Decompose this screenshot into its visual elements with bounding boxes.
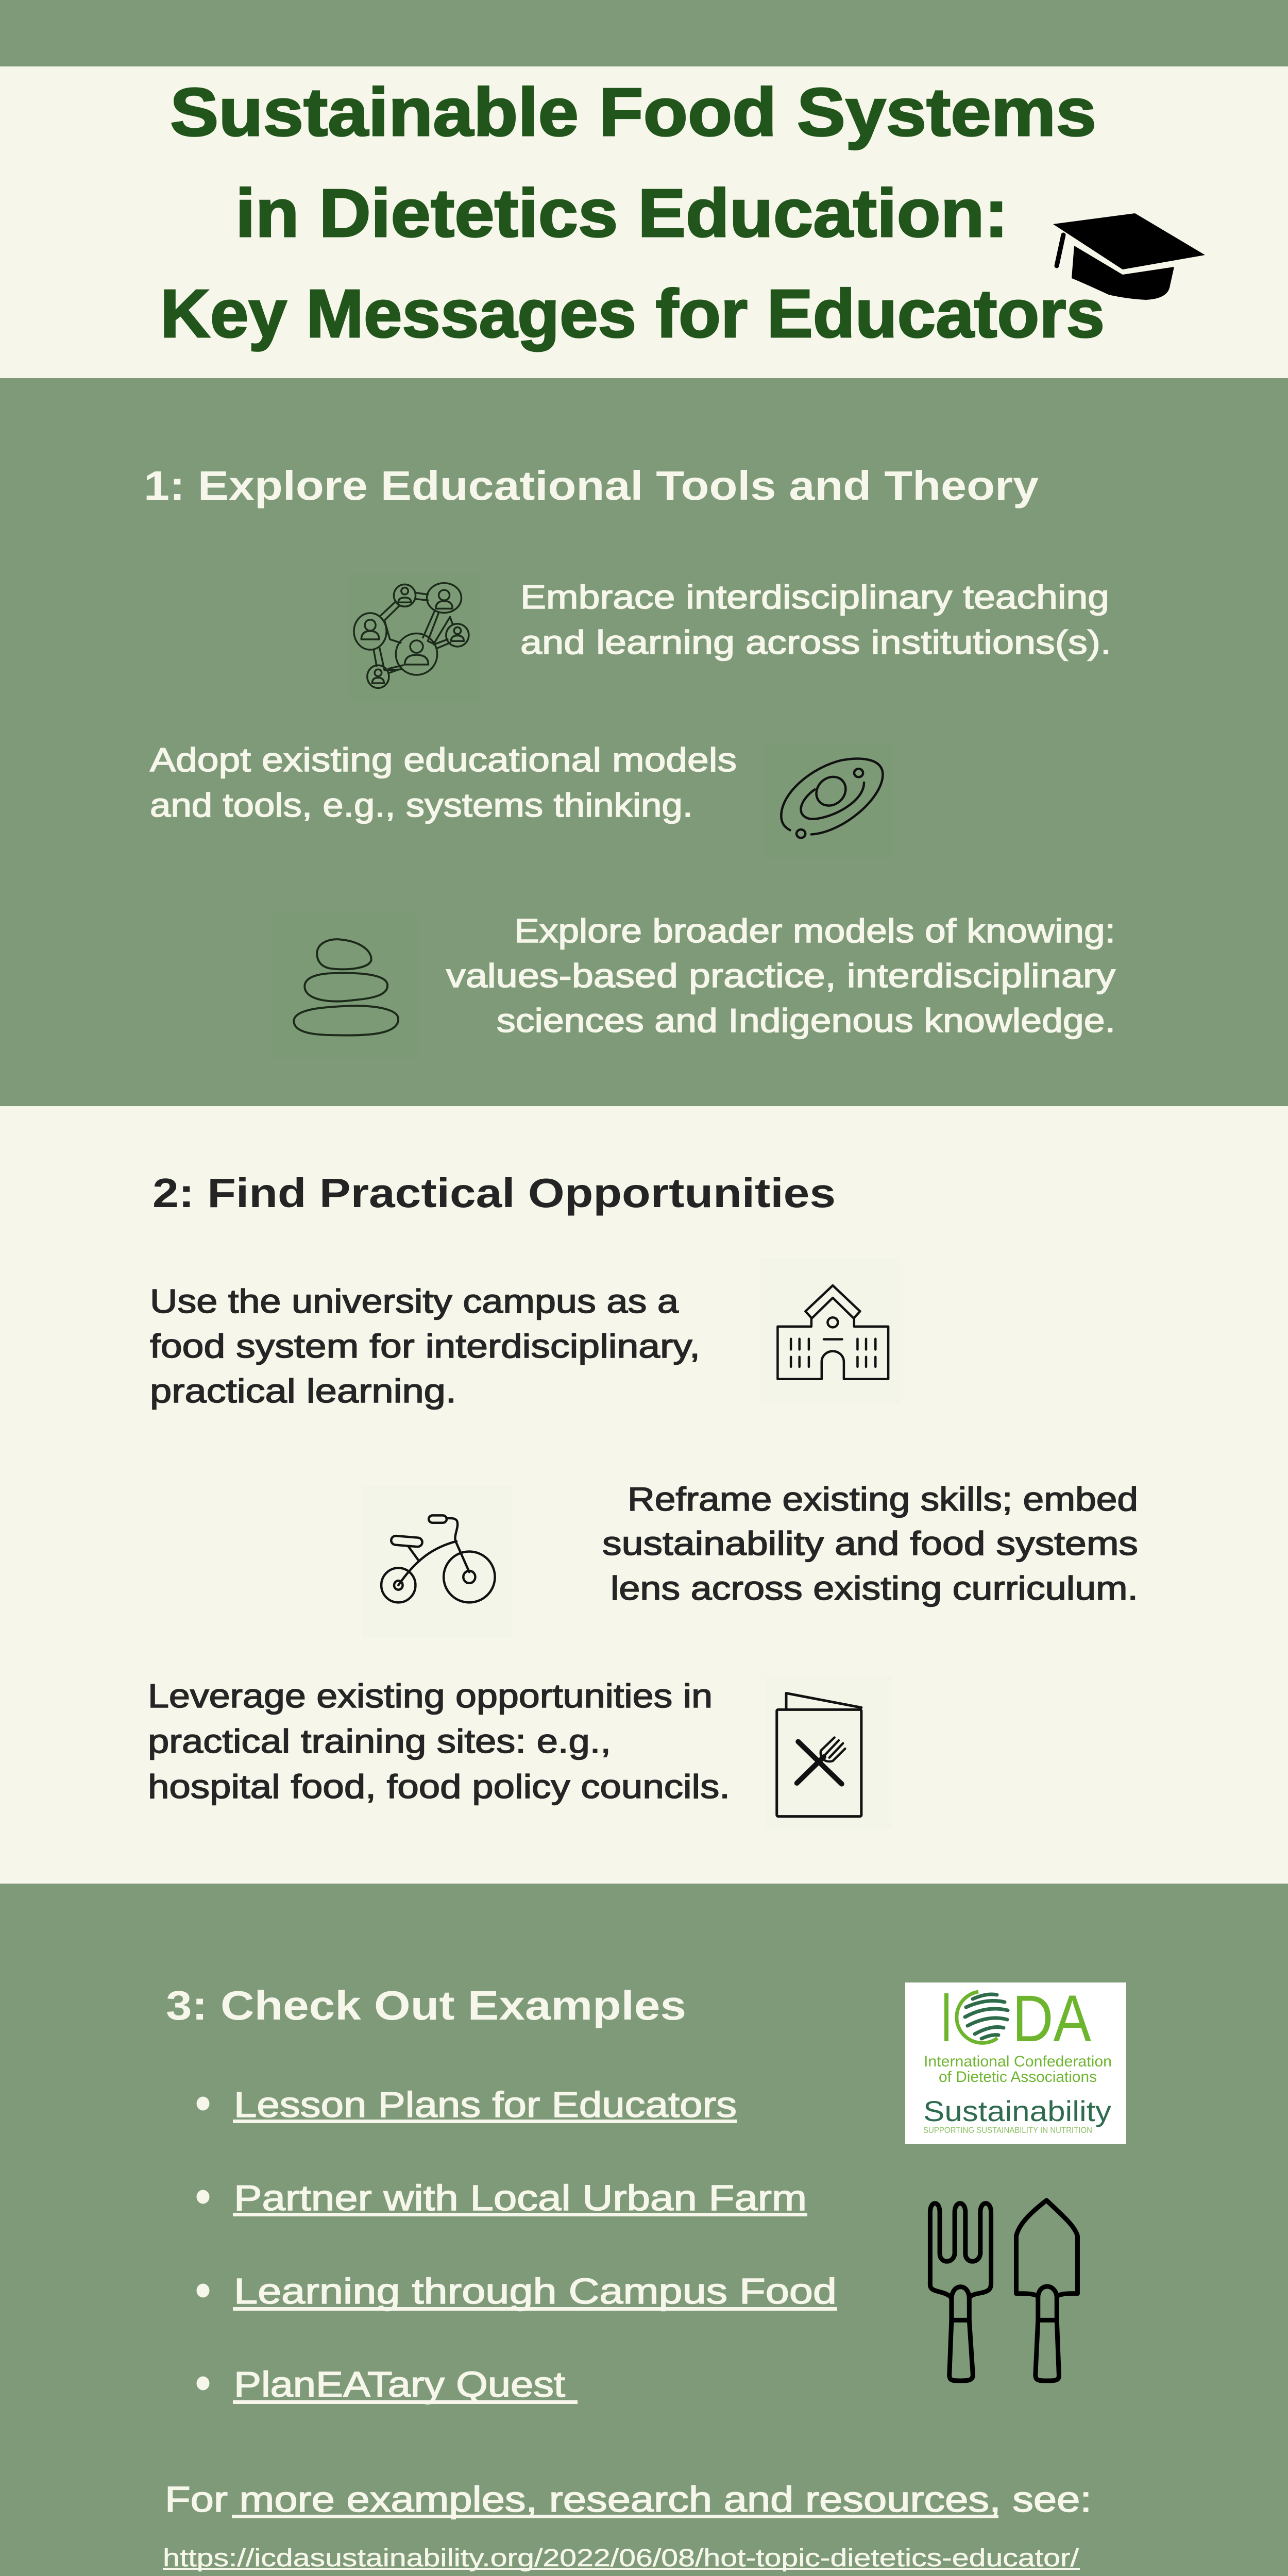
panel: section 3 check out examples: [0, 1884, 1288, 2576]
text: university campus: food system for interdisciplinary,: [150, 1327, 700, 1365]
title: in Dietetics Education:: [235, 175, 1008, 251]
text: explore broader models: Explore broader models of knowing:: [514, 912, 1115, 950]
logo: ICDA sustainability: [905, 1982, 1126, 2144]
text: explore broader models: sciences and Indigenous knowledge.: [497, 1002, 1115, 1039]
logo: ICDA sustainability: DA: [1012, 1982, 1092, 2056]
text: embrace interdisciplinary: [520, 578, 1111, 661]
panel: section 1 explore educational tools and theory: [0, 378, 1288, 1106]
list item: planeatary quest: PlanEATary Quest: [234, 2364, 565, 2404]
text: university campus: practical learning.: [150, 1372, 456, 1410]
logo: ICDA sustainability: of Dietetic Associations: [939, 2069, 1097, 2086]
list item: campus food: Learning through Campus Food: [234, 2271, 837, 2311]
text: adopt existing models: and tools, e.g., systems thinking.: [150, 786, 693, 824]
text: adopt existing models: [150, 741, 737, 824]
heading: section 1: 1: Explore Educational Tools and Theory: [144, 463, 1039, 509]
text: explore broader models: values-based practice, interdisciplinary: [446, 957, 1116, 994]
text: leverage opportunities: hospital food, food policy councils.: [148, 1768, 730, 1805]
icon: garden fork and trowel: [930, 2200, 1077, 2381]
panel: section 2 find practical opportunities: [0, 1106, 1288, 1884]
text: reframe existing skills: Reframe existing skills; embed: [628, 1480, 1138, 1518]
text: embrace interdisciplinary: and learning across institutions(s).: [520, 623, 1111, 661]
icon: people network: [347, 574, 480, 700]
text: more examples: For more examples, research and resources, see:: [165, 2479, 1092, 2519]
text: reframe existing skills: lens across existing curriculum.: [611, 1569, 1138, 1607]
text: university campus: [150, 1282, 700, 1410]
list item: lesson plans: Lesson Plans for Educators: [234, 2084, 737, 2125]
text: leverage opportunities: [148, 1677, 730, 1805]
icon: school building: [760, 1258, 901, 1404]
panel: title header: [160, 74, 1205, 351]
icon: stacked stones: [273, 914, 418, 1059]
text: explore broader models: [446, 912, 1116, 1039]
list item: urban farm: Partner with Local Urban Farm: [234, 2178, 807, 2218]
list: example links: [197, 2084, 837, 2404]
text: leverage opportunities: Leverage existing opportunities in: [148, 1677, 713, 1715]
text: reframe existing skills: [602, 1480, 1138, 1607]
icon: tricycle: [363, 1486, 512, 1638]
icon: orbit systems: [763, 744, 893, 858]
text: embrace interdisciplinary: Embrace interdisciplinary teaching: [520, 578, 1109, 616]
logo: ICDA sustainability: International Confederation: [924, 2053, 1112, 2070]
logo: ICDA sustainability: Sustainability: [923, 2095, 1111, 2127]
heading: section 3: 3: Check Out Examples: [166, 1982, 686, 2028]
link: ICDA url: https://icdasustainability.org/2022/06/08/hot-topic-dietetics-educator/: [163, 2545, 1079, 2572]
title: [160, 74, 1105, 351]
title: Sustainable Food Systems: [170, 74, 1096, 150]
text: university campus: Use the university campus as a: [150, 1282, 679, 1320]
text: reframe existing skills: sustainability and food systems: [602, 1524, 1138, 1562]
logo: ICDA sustainability: SUPPORTING SUSTAINABILITY IN NUTRITION: [923, 2125, 1092, 2135]
title: Key Messages for Educators: [160, 276, 1105, 351]
heading: section 2: 2: Find Practical Opportunities: [152, 1170, 836, 1216]
top band: [0, 0, 1288, 66]
text: leverage opportunities: practical training sites: e.g.,: [148, 1722, 611, 1760]
icon: restaurant menu: [766, 1677, 892, 1828]
icon: graduation cap: [1053, 213, 1205, 300]
text: adopt existing models: Adopt existing educational models: [150, 741, 737, 778]
